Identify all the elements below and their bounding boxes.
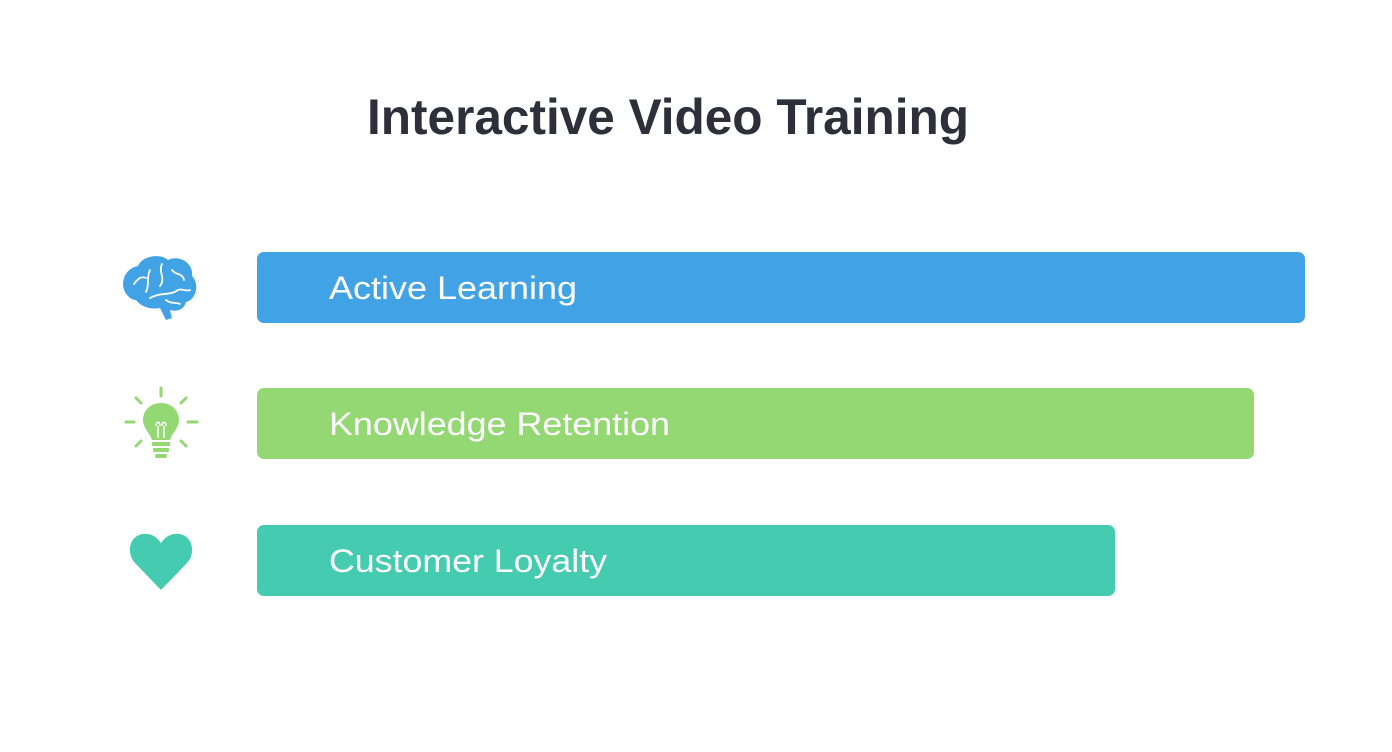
bar: knowledge retention: Knowledge Retention <box>329 406 670 442</box>
bar: knowledge retention <box>257 388 1254 459</box>
icon: heart <box>130 534 192 590</box>
title: Interactive Video Training <box>367 89 969 145</box>
bar: active learning <box>257 252 1305 323</box>
bar: customer loyalty: Customer Loyalty <box>329 543 607 579</box>
bar: customer loyalty <box>257 525 1115 596</box>
icon: lightbulb <box>126 388 197 458</box>
bar: active learning: Active Learning <box>329 270 577 306</box>
icon: brain <box>123 256 196 320</box>
